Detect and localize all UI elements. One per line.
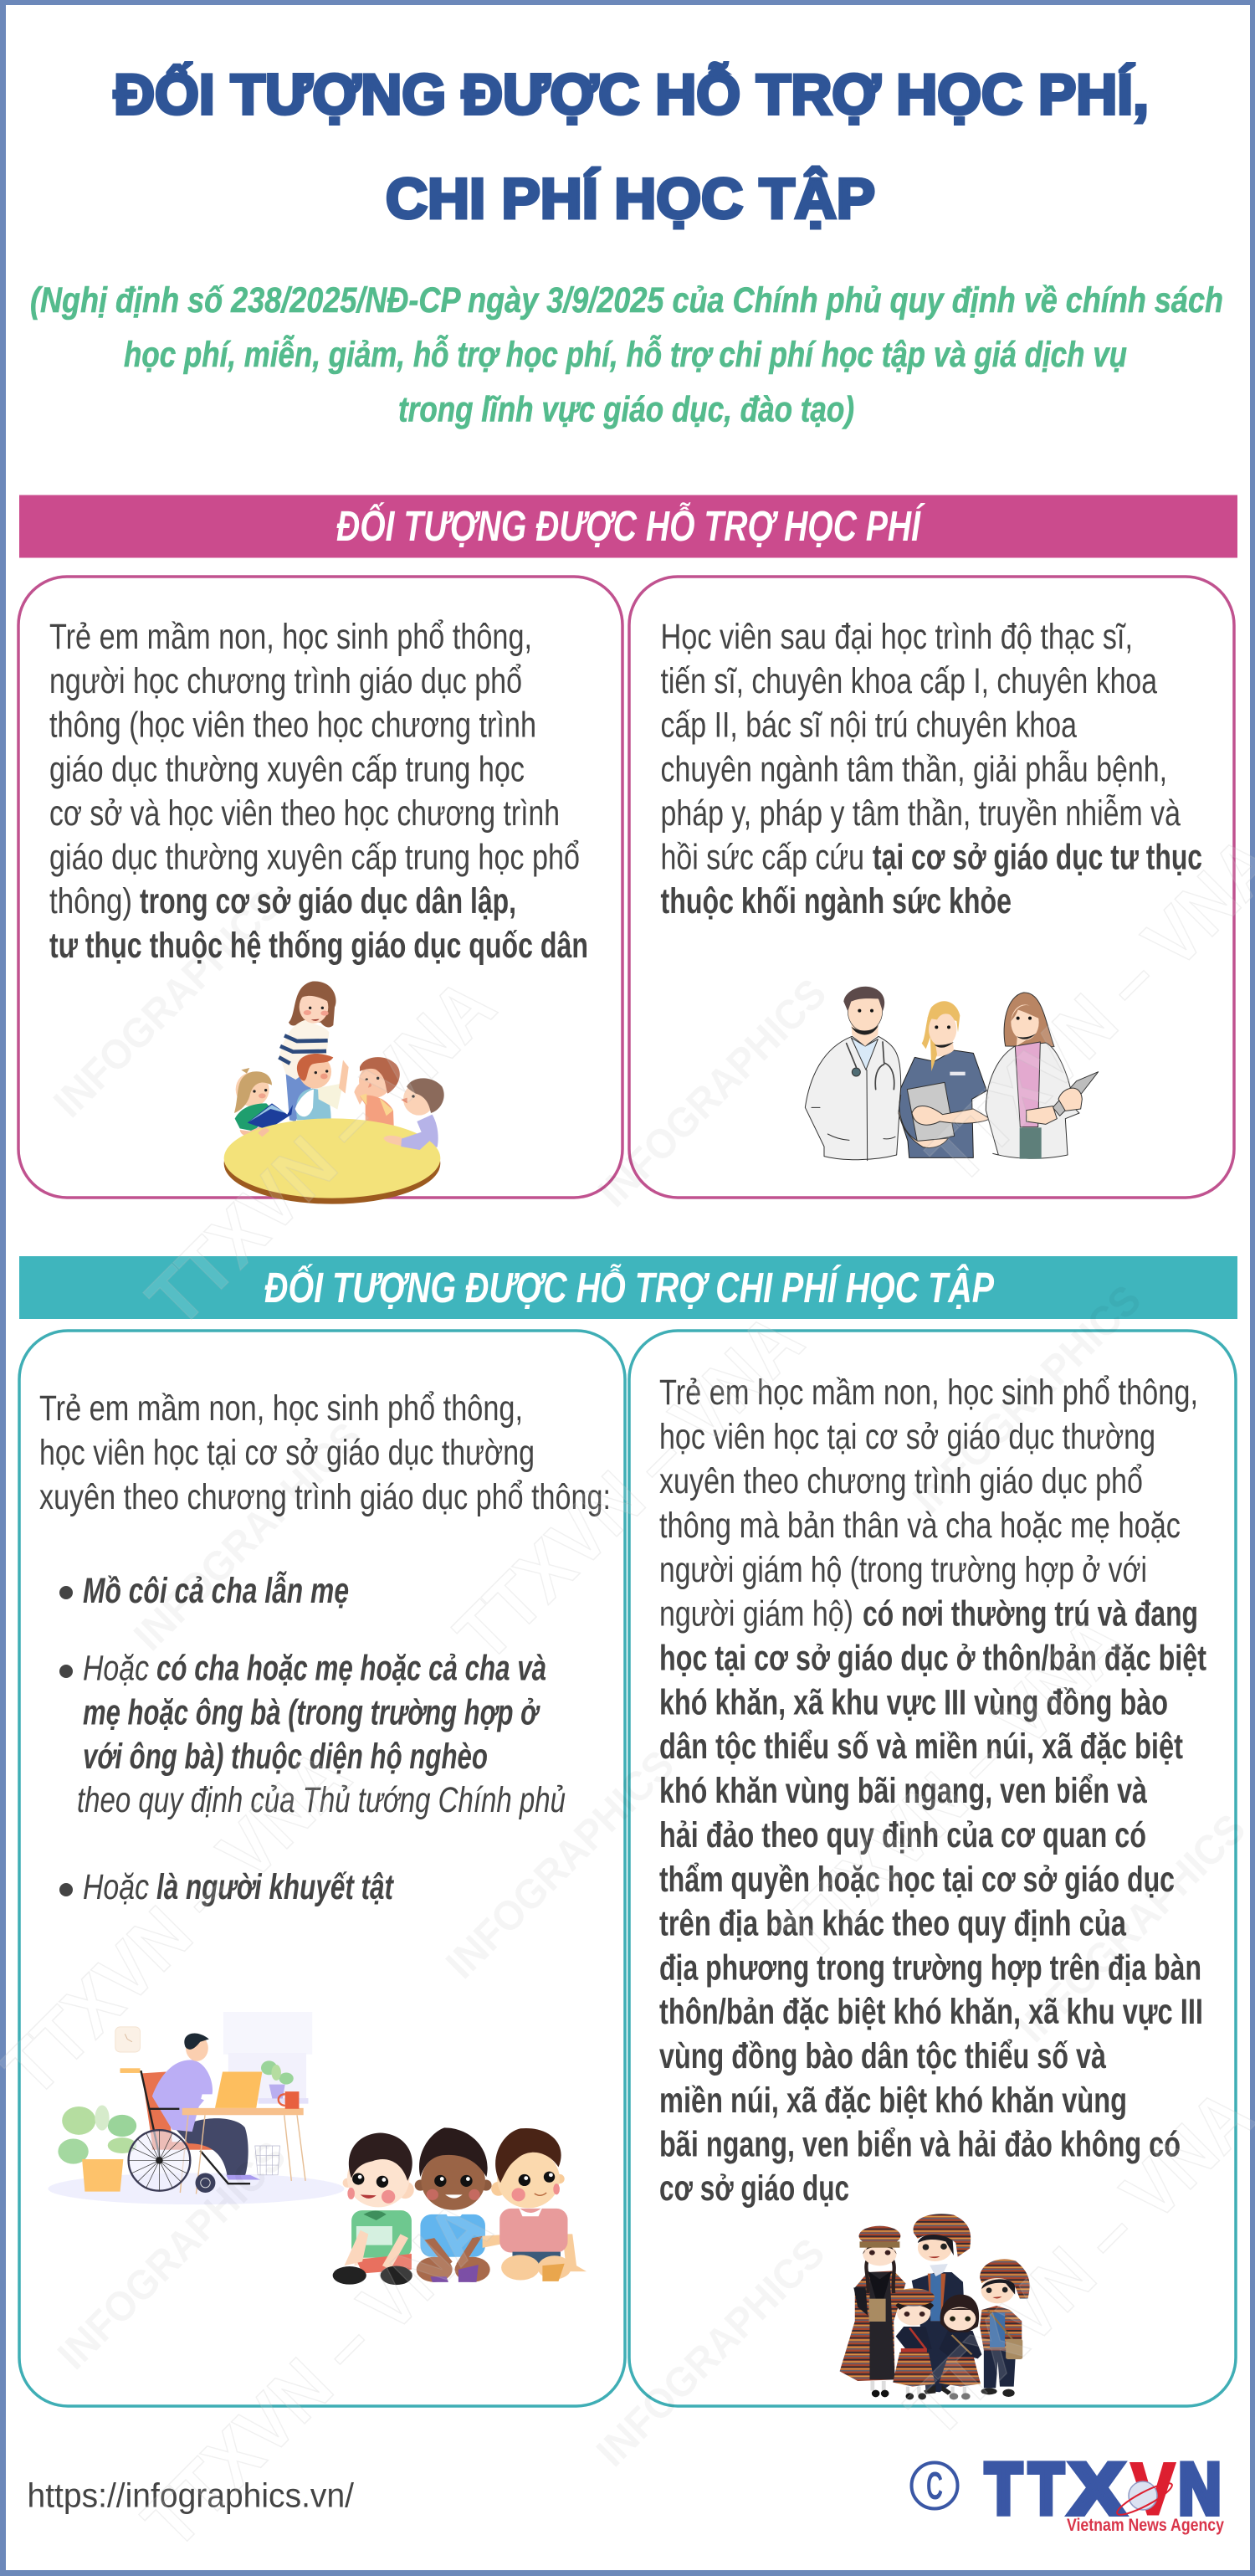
title: CHI PHÍ HỌC TẬP [386, 166, 875, 231]
bullet: poor households: mẹ hoặc ông bà (trong trường hợp ở [83, 1692, 540, 1732]
watermark pattern [0, 820, 1255, 2564]
title: ĐỐI TƯỢNG ĐƯỢC HỖ TRỢ HỌC PHÍ, [114, 62, 1149, 126]
text block: general learners: trong cơ sở giáo dục dân lập, [140, 881, 516, 921]
bullet: people with disabilities [59, 1867, 394, 1907]
text block: postgraduate learners: cấp II, bác sĩ nội trú chuyên khoa [661, 705, 1077, 745]
bullet: poor households: theo quy định của Thủ tướng Chính phủ [77, 1780, 566, 1820]
text block: intro: học viên học tại cơ sở giáo dục thường [39, 1433, 535, 1473]
watermark pattern: TTXVN – VNA [439, 1297, 819, 1677]
panel: tuition support, preschool and general learners [18, 577, 622, 1198]
text block: postgraduate learners [661, 617, 1202, 921]
watermark pattern: TTXVN – VNA [762, 1598, 1142, 1978]
illustration: wheelchair user at desk [48, 2012, 345, 2204]
table [224, 1118, 440, 1204]
text block: general learners: giáo dục thường xuyên cấp trung học [49, 750, 525, 790]
logo: TTXVN Vietnam News Agency: V [1131, 2449, 1175, 2529]
illustration: teacher and children at a table [224, 982, 444, 1204]
icon: copyright symbol: C [926, 2464, 943, 2507]
footer url: https://infographics.vn/ [27, 2476, 355, 2514]
bullet: orphans: Mồ côi cả cha lẫn mẹ [83, 1570, 349, 1611]
text block: general learners: tư thục thuộc hệ thống giáo dục quốc dân [49, 926, 588, 966]
watermark pattern: INFOGRAPHICS [904, 1276, 1150, 1522]
text block: general learners: người học chương trình giáo dục phổ [49, 661, 522, 701]
watermark pattern: INFOGRAPHICS [437, 1742, 683, 1988]
watermark pattern: INFOGRAPHICS [589, 970, 835, 1216]
illustration: ethnic minority family [840, 2214, 1030, 2399]
bullet: poor households [59, 1649, 566, 1820]
watermark pattern: INFOGRAPHICS [44, 880, 290, 1126]
subtitle: decree reference [30, 280, 1223, 430]
logo: TTXVN Vietnam News Agency: X [1069, 2449, 1124, 2529]
bullet: orphans [59, 1570, 349, 1611]
text block: intro: xuyên theo chương trình giáo dục phổ thông: [39, 1477, 611, 1517]
bullet: poor households: với ông bà) thuộc diện hộ nghèo [83, 1737, 488, 1777]
icon: copyright symbol [912, 2462, 957, 2509]
logo: TTXVN Vietnam News Agency: N [1178, 2449, 1222, 2529]
text block: general learners: thông (học viên theo học chương trình [49, 705, 536, 745]
title [114, 62, 1149, 231]
bullet: poor households: có cha hoặc mẹ hoặc cả cha và [156, 1649, 546, 1689]
section header: tuition support [19, 495, 1237, 557]
bullet: people with disabilities: Hoặc [83, 1867, 149, 1907]
watermark pattern: INFOGRAPHICS [49, 2132, 295, 2378]
bullet: people with disabilities: là người khuyết tật [156, 1867, 394, 1907]
text block: general learners: giáo dục thường xuyên cấp trung học phổ [49, 837, 580, 877]
section header: tuition support: ĐỐI TƯỢNG ĐƯỢC HỖ TRỢ HỌC PHÍ [336, 501, 925, 550]
illustration: three health workers [805, 987, 1099, 1161]
watermark pattern: TTXVN – VNA [131, 962, 511, 1342]
text block: intro [39, 1388, 611, 1517]
text block: disadvantaged areas: người giám hộ) [659, 1593, 853, 1634]
text block: postgraduate learners: hồi sức cấp cứu [661, 837, 864, 877]
text block: disadvantaged areas: trên địa bàn khác theo quy định của [659, 1903, 1127, 1943]
bullet: poor households: Hoặc [83, 1649, 149, 1689]
watermark pattern: INFOGRAPHICS [587, 2230, 833, 2476]
watermark pattern: INFOGRAPHICS [125, 1414, 371, 1660]
panel: learning cost support, disadvantaged areas [629, 1331, 1236, 2406]
text block: general learners [49, 617, 588, 966]
text block: intro: Trẻ em mầm non, học sinh phổ thông, [39, 1388, 523, 1429]
illustration: three seated children [333, 2127, 587, 2285]
text block: disadvantaged areas: cơ sở giáo dục [659, 2168, 849, 2209]
subtitle: decree reference: trong lĩnh vực giáo dục, đào tạo) [398, 390, 854, 430]
text block: disadvantaged areas: vùng đồng bào dân tộc thiểu số và [659, 2036, 1107, 2076]
panel: learning cost support, eligibility list [19, 1331, 625, 2406]
logo: TTXVN Vietnam News Agency: T [986, 2449, 1022, 2529]
text block: postgraduate learners: thuộc khối ngành sức khỏe [661, 881, 1012, 921]
text block: general learners: cơ sở và học viên theo học chương trình [49, 793, 560, 834]
text block: postgraduate learners: Học viên sau đại học trình độ thạc sĩ, [661, 617, 1133, 657]
panel: tuition support, postgraduate health learners [629, 577, 1234, 1198]
text block: general learners: thông) [49, 881, 132, 921]
section header: learning cost support [19, 1256, 1237, 1319]
section header: learning cost support: ĐỐI TƯỢNG ĐƯỢC HỖ TRỢ CHI PHÍ HỌC TẬP [264, 1263, 995, 1311]
text block: general learners: Trẻ em mầm non, học sinh phổ thông, [49, 617, 532, 657]
logo: TTXVN Vietnam News Agency: T [1029, 2449, 1064, 2529]
logo: TTXVN Vietnam News Agency [986, 2449, 1224, 2535]
watermark pattern: TTXVN – VNA [127, 2184, 507, 2564]
text block: disadvantaged areas [659, 1373, 1206, 2209]
text block: disadvantaged areas: xuyên theo chương trình giáo dục phổ [659, 1461, 1143, 1501]
logo: TTXVN Vietnam News Agency: Vietnam News Agency [1067, 2516, 1224, 2535]
